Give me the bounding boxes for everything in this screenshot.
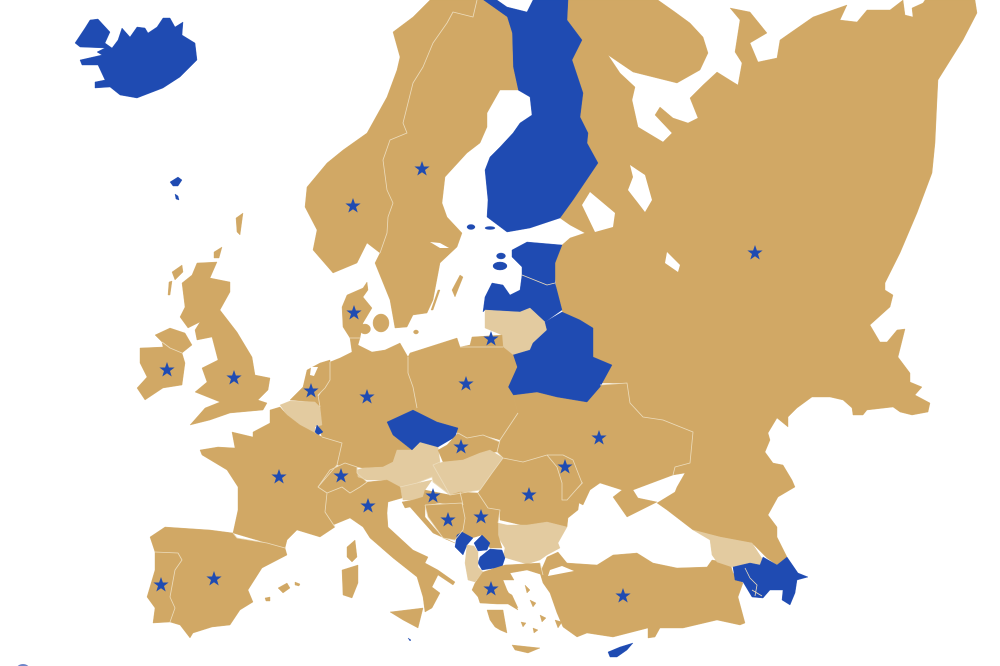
country: Sweden [375, 0, 518, 334]
exclave: Kaliningrad [460, 335, 503, 347]
country: Georgia [693, 530, 765, 567]
country: Bosnia and Herzegovina [425, 503, 465, 540]
lakes: Ladoga, Onega, Rybinsk [582, 165, 680, 272]
country: Slovenia [400, 480, 432, 500]
country: Croatia [402, 490, 463, 543]
sea: Marmara [548, 566, 574, 576]
country: Slovakia [438, 433, 500, 462]
country: Spain [150, 527, 300, 638]
country: France [200, 407, 342, 548]
country: Luxembourg [315, 425, 323, 435]
island: Malta [408, 638, 411, 641]
country: Portugal [147, 552, 182, 623]
cropped blue marker at bottom edge [15, 664, 31, 666]
country: Belarus [508, 312, 612, 402]
country: Finland [467, 0, 598, 232]
country: Denmark [342, 282, 389, 338]
lake: Vanern [430, 242, 449, 248]
country: Czechia [387, 410, 458, 450]
country: Serbia [460, 492, 502, 548]
country: Italy [325, 480, 455, 628]
country: Hungary [432, 450, 503, 495]
country: Latvia [483, 275, 562, 322]
country: Moldova [547, 455, 582, 500]
countries: Armenia and Azerbaijan [733, 557, 808, 605]
country: Turkey [540, 552, 745, 638]
country: Lithuania [485, 308, 547, 355]
country: Austria [357, 442, 440, 487]
sea inlet: IJsselmeer [310, 367, 318, 376]
country: Russia [555, 0, 977, 565]
islands: Faroe [170, 177, 182, 200]
country: Greece [472, 563, 562, 653]
country: Cyprus [608, 643, 633, 657]
country: Belgium [280, 401, 322, 433]
country: Albania [465, 545, 483, 582]
country: Germany [317, 338, 417, 468]
country: Bulgaria [498, 522, 567, 564]
country: Netherlands [290, 360, 330, 407]
country: Ireland [137, 328, 192, 400]
country: Iceland [75, 18, 197, 98]
country: Switzerland [318, 463, 367, 493]
country: Kosovo [474, 535, 490, 551]
country: Ukraine [497, 383, 693, 517]
country: Poland [408, 338, 518, 440]
stars [153, 161, 763, 602]
country: United Kingdom [168, 213, 270, 425]
country: Montenegro [455, 532, 473, 555]
country: North Macedonia [478, 549, 505, 570]
country: Norway [305, 0, 477, 273]
country: Romania [478, 455, 579, 527]
country: Estonia [493, 242, 562, 285]
